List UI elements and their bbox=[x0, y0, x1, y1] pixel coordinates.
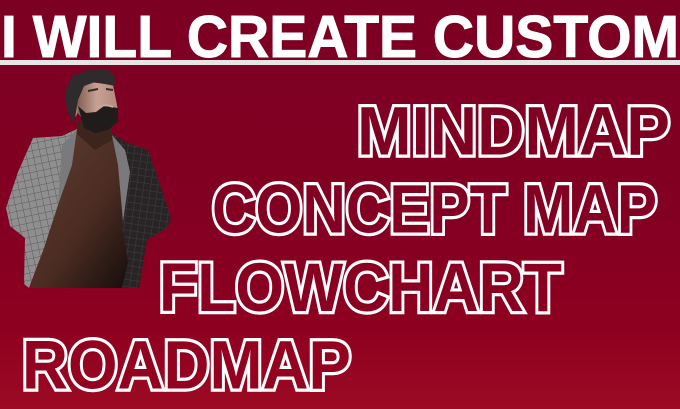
portrait: man in a checked blazer bbox=[6, 69, 171, 288]
blazer left side bbox=[6, 129, 77, 288]
mouth bbox=[97, 105, 113, 108]
lapels bbox=[58, 129, 130, 222]
outlined word: mindmap: MINDMAP bbox=[357, 92, 670, 170]
ear bbox=[70, 103, 78, 117]
outlined word: roadmap: ROADMAP bbox=[22, 326, 351, 404]
eyes and brows bbox=[88, 89, 113, 91]
neck and collar bbox=[77, 122, 112, 150]
shirt bbox=[30, 130, 138, 288]
face bbox=[76, 82, 118, 124]
title underline bbox=[0, 60, 680, 65]
hair bbox=[65, 69, 115, 124]
outlined word: flowchart: FLOWCHART bbox=[159, 249, 562, 326]
beard bbox=[78, 106, 118, 133]
blazer right side bbox=[112, 133, 171, 288]
